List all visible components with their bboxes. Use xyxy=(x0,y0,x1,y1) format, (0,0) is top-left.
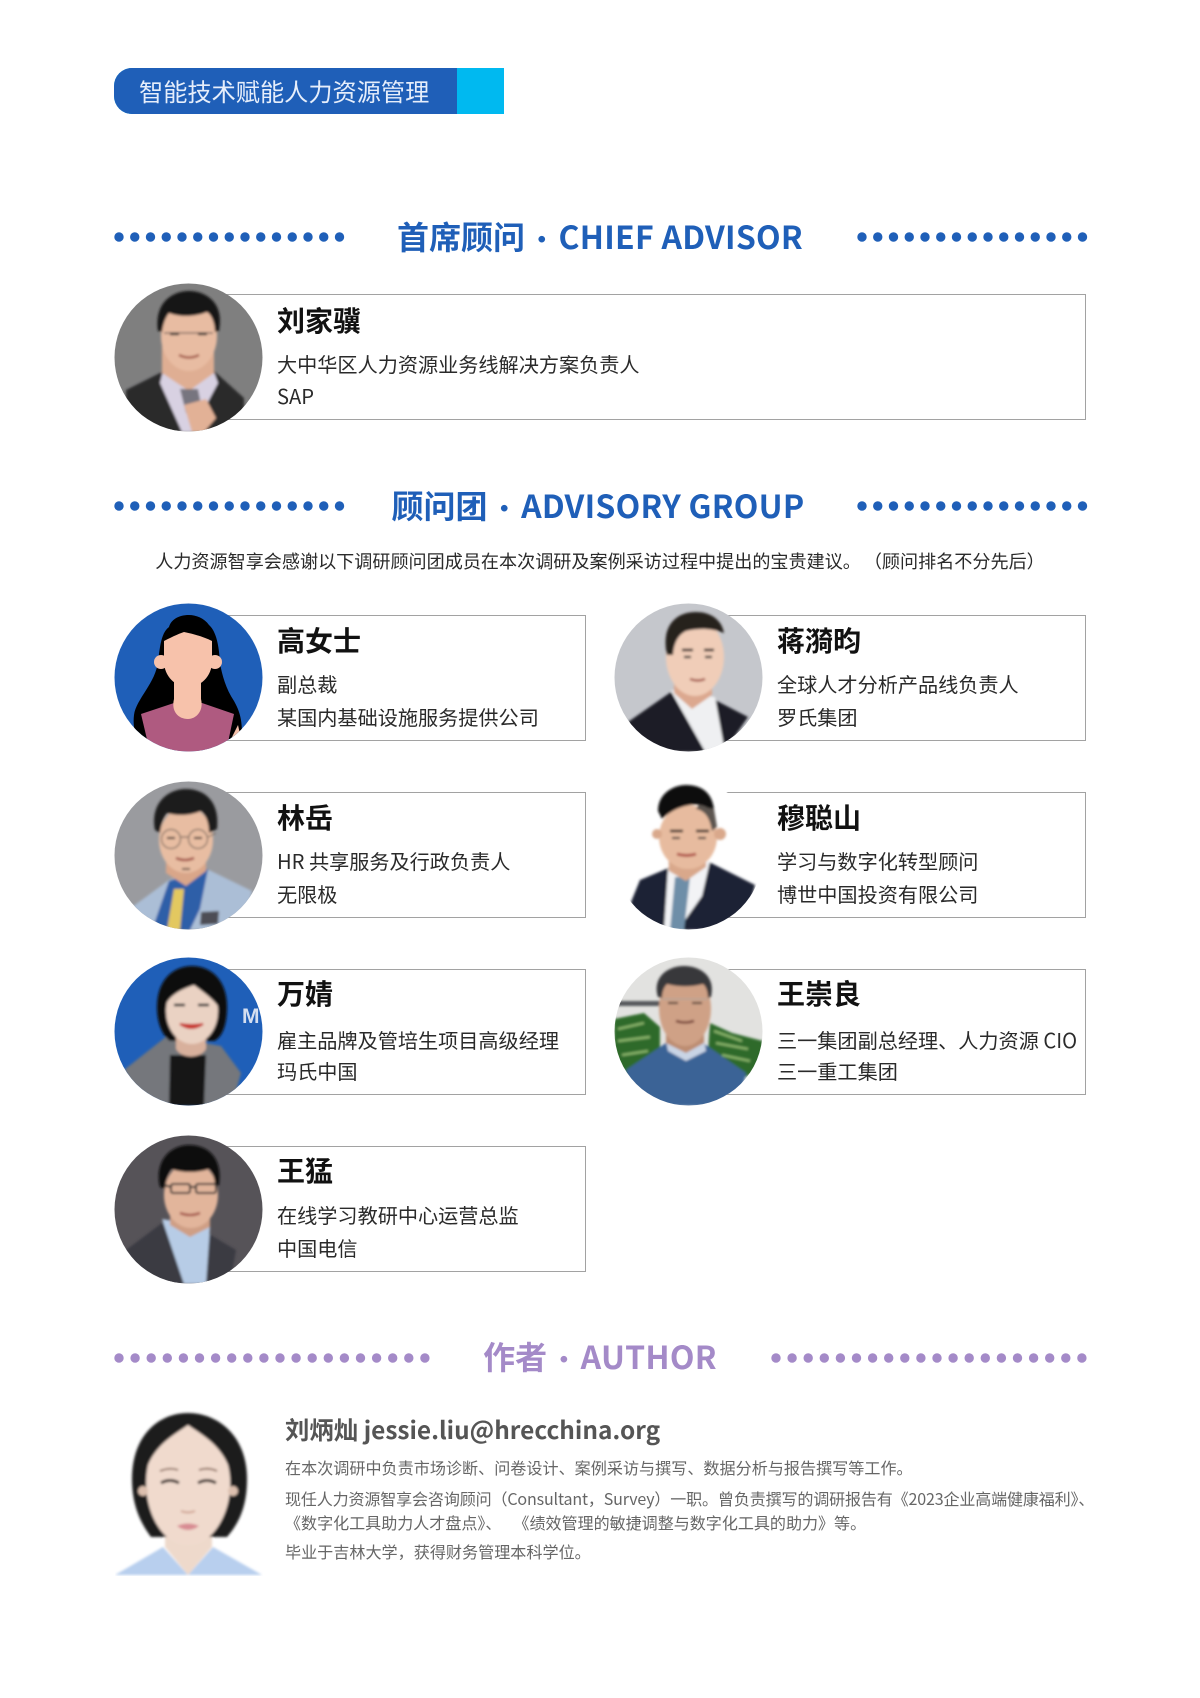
role: 雇主品牌及管培生项目高级经理 xyxy=(277,1025,559,1054)
portrait: 王崇良 xyxy=(614,958,762,1106)
organisation: 玛氏中国 xyxy=(277,1056,358,1085)
card: 蒋漪昀 xyxy=(614,604,1086,752)
role: 副总裁 xyxy=(277,669,337,698)
name: 万婧 xyxy=(277,973,333,1013)
author bio: 现任人力资源智享会咨询顾问（Consultant，Survey）一职。曾负责撰写的调研报告有《2023企业高端健康福利》、 xyxy=(285,1486,1094,1510)
portrait: author 刘炳灿 xyxy=(116,1411,262,1576)
author bio xyxy=(285,1455,1094,1563)
header tag: report section title: 智能技术赋能人力资源管理 xyxy=(139,73,429,108)
organisation: 罗氏集团 xyxy=(777,702,858,731)
heading: author: 作者 · AUTHOR xyxy=(483,1333,717,1379)
heading: chief advisor: 首席顾问 · CHIEF ADVISOR xyxy=(397,213,803,259)
author bio: 毕业于吉林大学，获得财务管理本科学位。 xyxy=(285,1539,591,1563)
name: 林岳 xyxy=(277,797,333,837)
author bio: 《数字化工具助力人才盘点》、 《绩效管理的敏捷调整与数字化工具的助力》等。 xyxy=(285,1510,866,1534)
organisation: 中国电信 xyxy=(277,1233,358,1262)
name: 刘家骥 xyxy=(277,300,361,340)
role: 在线学习教研中心运营总监 xyxy=(277,1200,519,1229)
card: 穆聪山 xyxy=(630,783,1086,930)
name: 王猛 xyxy=(277,1150,333,1190)
portrait: 刘家骥 xyxy=(114,284,262,432)
card: 万婧 xyxy=(114,958,586,1106)
organisation: 某国内基础设施服务提供公司 xyxy=(277,702,539,731)
name: 穆聪山 xyxy=(777,797,861,837)
role: 学习与数字化转型顾问 xyxy=(777,846,978,875)
role: 大中华区人力资源业务线解决方案负责人 xyxy=(277,349,640,378)
card: 高女士 xyxy=(114,604,586,752)
organisation: 无限极 xyxy=(277,879,337,908)
portrait: 万婧: M xyxy=(242,1005,260,1028)
portrait: 穆聪山 xyxy=(630,783,756,930)
portrait: 王猛 xyxy=(114,1136,262,1284)
organisation: 三一重工集团 xyxy=(777,1056,898,1085)
card: 林岳 xyxy=(114,782,586,930)
role: 全球人才分析产品线负责人 xyxy=(777,669,1019,698)
header tag: report section title xyxy=(114,68,504,114)
card: 王崇良 xyxy=(614,958,1086,1106)
card: chief advisor 刘家骥 xyxy=(114,284,1086,432)
portrait: 林岳 xyxy=(114,782,262,930)
portrait: 万婧 xyxy=(114,958,262,1106)
author bio: 在本次调研中负责市场诊断、问卷设计、案例采访与撰写、数据分析与报告撰写等工作。 xyxy=(285,1455,913,1479)
name: 高女士 xyxy=(277,620,361,660)
portrait: female avatar xyxy=(114,604,262,752)
name: 王崇良 xyxy=(777,973,861,1013)
role: 三一集团副总经理、人力资源 CIO xyxy=(777,1025,1077,1054)
organisation: SAP xyxy=(277,381,314,410)
intro text: 人力资源智享会感谢以下调研顾问团成员在本次调研及案例采访过程中提出的宝贵建议。 （顾问排名不分先后） xyxy=(155,548,1045,574)
name: 蒋漪昀 xyxy=(777,620,861,660)
author name and email: 刘炳灿 jessie.liu@hrecchina.org xyxy=(285,1412,660,1447)
card: 王猛 xyxy=(114,1136,586,1284)
heading: advisory group: 顾问团 · ADVISORY GROUP xyxy=(392,482,804,528)
role: HR 共享服务及行政负责人 xyxy=(277,846,510,875)
organisation: 博世中国投资有限公司 xyxy=(777,879,978,908)
portrait: 蒋漪昀 xyxy=(614,604,762,752)
